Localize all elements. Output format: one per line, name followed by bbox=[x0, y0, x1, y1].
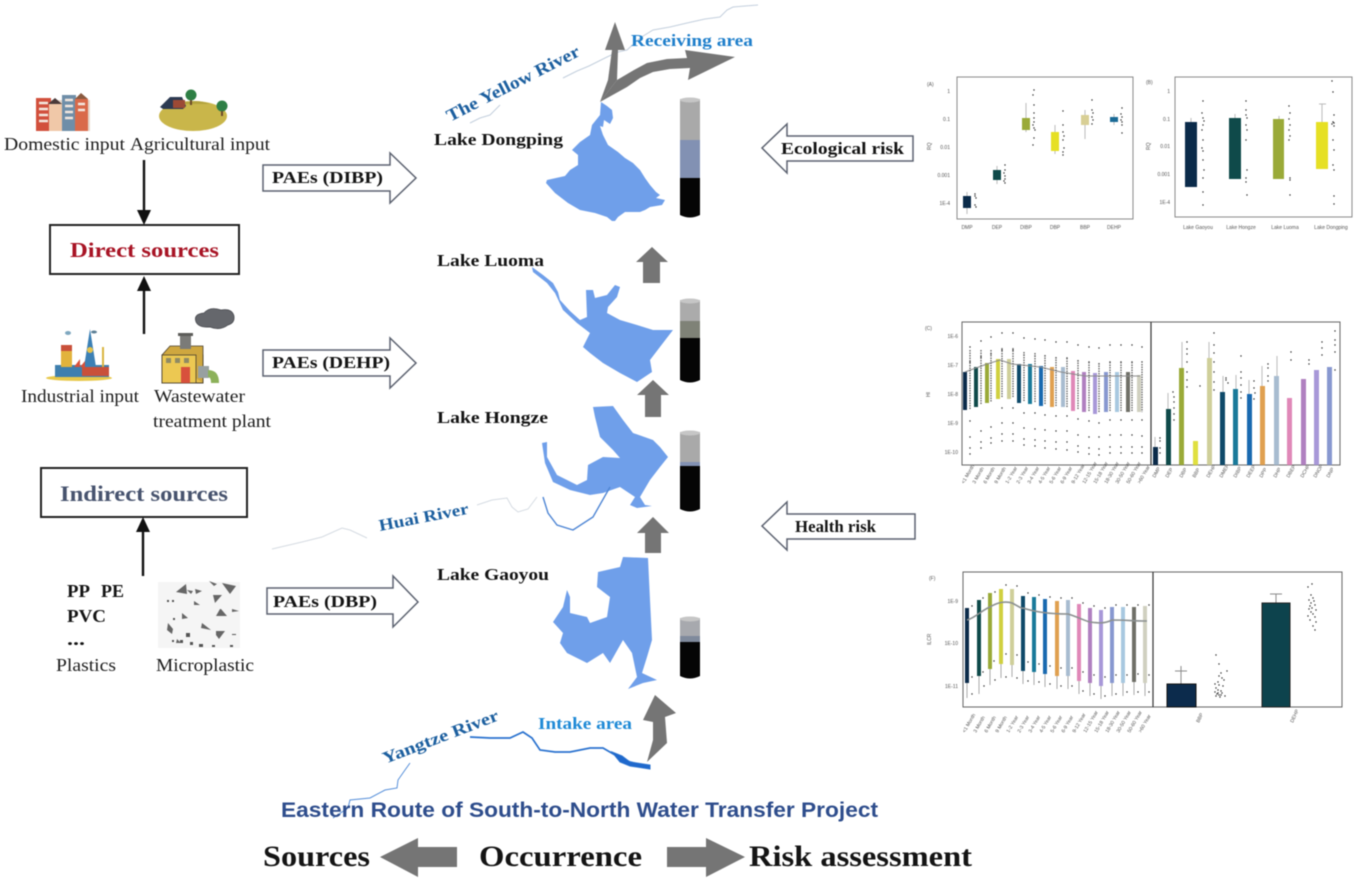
chart: RQ by compound (A): 1E-4 bbox=[939, 201, 950, 207]
arrow: occurrence to risk assessment bbox=[667, 838, 745, 877]
arrow: Hongze to Luoma bbox=[637, 380, 669, 417]
river: Yellow River bbox=[470, 5, 758, 123]
chart: HI by age and compound (C): 50-60 Year bbox=[1126, 461, 1143, 485]
chart: RQ by lake (B): RQ bbox=[1146, 142, 1152, 150]
arrow: occurrence to sources bbox=[380, 838, 457, 877]
chart: ILCR by age and compound (F): 1E-11 bbox=[945, 684, 958, 690]
chart: HI by age and compound (C): DCHP bbox=[1300, 463, 1312, 479]
chart: ILCR by age and compound (F): 9 Month bbox=[995, 715, 1009, 734]
core: Luoma sediment bbox=[680, 298, 700, 382]
label: industrial input: Industrial input bbox=[21, 386, 139, 406]
chart: HI by age and compound (C): DHP bbox=[1273, 466, 1283, 479]
chart: HI by age and compound (C): 3 Month bbox=[972, 466, 986, 485]
chart: ILCR by age and compound (F): 50-60 Year bbox=[1127, 710, 1144, 734]
chart: HI by age and compound (C): 2-3 Year bbox=[1016, 466, 1030, 485]
chart: RQ by lake (B): 0.01 bbox=[1160, 144, 1170, 150]
chart: RQ by compound (A): BBP bbox=[1080, 225, 1091, 231]
chart: HI by age and compound (C): 1E-6 bbox=[947, 334, 958, 340]
box: direct sources: Direct sources bbox=[70, 238, 219, 262]
chart: RQ by compound (A): 1 bbox=[947, 89, 950, 95]
chart: HI by age and compound (C): 5-6 Year bbox=[1049, 466, 1063, 485]
chart: ILCR by age and compound (F): DEHP bbox=[1289, 708, 1301, 724]
chart: RQ by compound (A): RQ bbox=[927, 142, 933, 150]
arrow: intake bbox=[643, 695, 676, 762]
river: Yangtze River bbox=[333, 732, 650, 818]
chart: HI by age and compound (C): 1-2 Year bbox=[1005, 466, 1019, 485]
chart: RQ by lake (B): Lake Hongze bbox=[1226, 225, 1256, 231]
chart: RQ by lake (B) bbox=[1146, 77, 1352, 231]
box: indirect sources bbox=[41, 468, 247, 517]
chart: ILCR by age and compound (F): 30-50 Year bbox=[1116, 710, 1133, 734]
chart: HI by age and compound (C): DMP bbox=[1152, 466, 1163, 479]
label: Occurrence: Occurrence bbox=[479, 840, 642, 873]
chart: RQ by compound (A): DEHP bbox=[1107, 225, 1122, 231]
panel: occurrence along water route bbox=[272, 5, 878, 822]
chart: ILCR by age and compound (F): 1E-10 bbox=[945, 641, 958, 647]
chart: ILCR by age and compound (F): 3 Month bbox=[973, 715, 987, 734]
chart: ILCR by age and compound (F): 2-3 Year bbox=[1017, 715, 1031, 734]
arrow: Ecological risk bbox=[762, 124, 913, 173]
chart: ILCR by age and compound (F): 6-9 Year bbox=[1061, 715, 1075, 734]
chart: ILCR by age and compound (F): 15-18 Year bbox=[1094, 710, 1111, 734]
label: project title: Eastern Route of South-to-North Water Transfer Project bbox=[281, 799, 878, 822]
label: Lake Gaoyou: Lake Gaoyou bbox=[437, 565, 549, 584]
label: Receiving area: Receiving area bbox=[631, 31, 754, 50]
chart: HI by age and compound (C): <1 Month bbox=[961, 464, 976, 485]
chart: HI by age and compound (C): DNOP bbox=[1313, 463, 1325, 479]
chart: HI by age and compound (C): 9 Month bbox=[994, 466, 1008, 485]
arrow: industrial inputs to direct sources bbox=[137, 276, 151, 334]
chart: RQ by lake (B): 1E-4 bbox=[1159, 200, 1170, 206]
chart: RQ by compound (A): (A) bbox=[927, 82, 934, 88]
chart: ILCR by age and compound (F): 12-15 Year bbox=[1083, 710, 1100, 734]
label: plastics: Plastics bbox=[56, 655, 116, 675]
arrow: PAEs DIBP bbox=[263, 153, 416, 203]
chart: HI by age and compound (C): HI bbox=[926, 392, 932, 397]
chart: HI by age and compound (C): DBEP bbox=[1286, 464, 1298, 479]
footer: framework flow bbox=[263, 838, 972, 877]
label: plastics list: PVC bbox=[67, 606, 106, 626]
chart: HI by age and compound (C) bbox=[925, 322, 1340, 485]
chart: HI by age and compound (C): 1E-10 bbox=[945, 450, 958, 456]
arrow: to north bbox=[600, 22, 625, 102]
arrow: Luoma to Dongping bbox=[636, 247, 668, 283]
label: wastewater treatment plant: Wastewater bbox=[154, 386, 245, 406]
chart: HI by age and compound (C): 9-12 Year bbox=[1071, 463, 1087, 485]
panel: sources bbox=[4, 90, 271, 675]
chart: RQ by compound (A): DMP bbox=[961, 225, 973, 231]
arrow: plastics to indirect sources bbox=[136, 517, 150, 576]
label: Intake area: Intake area bbox=[538, 714, 633, 733]
label: domestic input: Domestic input bbox=[4, 134, 125, 154]
core: Hongze sediment bbox=[680, 430, 700, 512]
icon: agricultural farm bbox=[159, 90, 228, 131]
chart: HI by age and compound (C): DIBP bbox=[1233, 465, 1244, 479]
icon: industrial factory bbox=[46, 329, 112, 381]
chart: RQ by lake (B): 1 bbox=[1167, 89, 1170, 95]
chart: RQ by compound (A): 0.001 bbox=[937, 173, 950, 179]
chart: HI by age and compound (C): DPP bbox=[1259, 467, 1269, 479]
chart: RQ by lake (B): (B) bbox=[1146, 80, 1153, 86]
chart: ILCR by age and compound (F): 9-12 Year bbox=[1072, 712, 1088, 734]
chart: RQ by compound (A): DIBP bbox=[1020, 225, 1032, 231]
label: Yangtze River: Yangtze River bbox=[380, 706, 502, 768]
label: plastics list bbox=[67, 581, 124, 649]
chart: HI by age and compound (C): (C) bbox=[925, 326, 932, 332]
label: agricultural input: Agricultural input bbox=[130, 134, 270, 154]
chart: ILCR by age and compound (F): >60 Year bbox=[1138, 713, 1153, 734]
arrow: PAEs DIBP: PAEs (DIBP) bbox=[272, 168, 383, 187]
chart: ILCR by age and compound (F): 1-2 Year bbox=[1006, 715, 1020, 734]
arrow: PAEs DBP bbox=[267, 576, 418, 627]
chart: HI by age and compound (C): 6 Month bbox=[983, 466, 997, 485]
chart: RQ by compound (A): 0.01 bbox=[940, 145, 950, 151]
chart: ILCR by age and compound (F): <1 Month bbox=[962, 713, 977, 734]
chart: HI by age and compound (C): 1E-8 bbox=[947, 392, 958, 398]
chart: ILCR by age and compound (F): 3-4 Year bbox=[1028, 715, 1042, 734]
arrow: PAEs DEHP: PAEs (DEHP) bbox=[272, 353, 390, 372]
panel: risk arrows bbox=[762, 124, 915, 550]
arrow: PAEs DEHP bbox=[263, 338, 416, 388]
chart: ILCR by age and compound (F): BBP bbox=[1195, 712, 1205, 724]
arrow: to receiving area bbox=[600, 50, 735, 102]
arrow: Gaoyou to Hongze bbox=[637, 517, 669, 553]
label: Lake Luoma: Lake Luoma bbox=[437, 251, 545, 270]
lake: Gaoyou bbox=[553, 557, 657, 689]
river: Huai River bbox=[272, 497, 537, 549]
core: Dongping sediment bbox=[680, 98, 700, 218]
arrow: PAEs DBP: PAEs (DBP) bbox=[273, 592, 377, 611]
lake: Dongping bbox=[546, 102, 665, 221]
chart: HI by age and compound (C): DBP bbox=[1179, 467, 1189, 479]
chart: ILCR by age and compound (F): (F) bbox=[929, 576, 936, 582]
label: Lake Dongping: Lake Dongping bbox=[434, 130, 564, 149]
chart: HI by age and compound (C): >60 Year bbox=[1137, 464, 1152, 485]
arrow: Health risk bbox=[762, 502, 915, 550]
chart: HI by age and compound (C): 1E-7 bbox=[947, 363, 958, 369]
label: microplastic: Microplastic bbox=[156, 655, 254, 675]
label: plastics list: PP bbox=[67, 581, 90, 601]
chart: HI by age and compound (C): DEEP bbox=[1246, 464, 1258, 479]
chart: HI by age and compound (C): 12-15 Year bbox=[1082, 461, 1099, 485]
chart: RQ by lake (B): Lake Dongping bbox=[1314, 225, 1348, 231]
chart: RQ by compound (A) bbox=[927, 77, 1133, 231]
chart: ILCR by age and compound (F): 1E-9 bbox=[947, 599, 958, 605]
icon: wastewater treatment plant bbox=[162, 309, 234, 383]
chart: HI by age and compound (C): 30-50 Year bbox=[1115, 461, 1132, 485]
chart: HI by age and compound (C): DMEP bbox=[1219, 463, 1231, 479]
arrow: inputs to direct sources bbox=[137, 160, 151, 225]
chart: HI by age and compound (C): 1E-9 bbox=[947, 421, 958, 427]
box: indirect sources: Indirect sources bbox=[60, 481, 228, 506]
chart: HI by age and compound (C): 6-9 Year bbox=[1060, 466, 1074, 485]
chart: HI by age and compound (C): DEHP bbox=[1206, 463, 1218, 479]
chart: RQ by lake (B): 0.001 bbox=[1157, 172, 1170, 178]
lake: Hongze bbox=[542, 406, 668, 530]
chart: ILCR by age and compound (F): 4-5 Year bbox=[1039, 715, 1053, 734]
chart: HI by age and compound (C): DEP bbox=[1165, 467, 1175, 479]
chart: ILCR by age and compound (F): ILCR bbox=[927, 633, 933, 645]
chart: RQ by lake (B): 0.1 bbox=[1163, 117, 1170, 123]
label: plastics list: PE bbox=[101, 581, 124, 601]
chart: ILCR by age and compound (F): 5-6 Year bbox=[1050, 715, 1064, 734]
chart: RQ by compound (A): DBP bbox=[1050, 225, 1061, 231]
chart: RQ by lake (B): Lake Gaoyou bbox=[1183, 225, 1213, 231]
lake: Luoma bbox=[532, 267, 673, 382]
chart: HI by age and compound (C): 4-5 Year bbox=[1038, 466, 1052, 485]
box: direct sources bbox=[50, 225, 239, 274]
chart: HI by age and compound (C): 15-18 Year bbox=[1093, 461, 1110, 485]
chart: ILCR by age and compound (F) bbox=[927, 572, 1342, 734]
arrow: Health risk: Health risk bbox=[795, 517, 877, 536]
label: Risk assessment: Risk assessment bbox=[749, 840, 972, 873]
label: wastewater treatment plant: treatment plant bbox=[153, 411, 271, 431]
chart: RQ by compound (A): 0.1 bbox=[943, 117, 950, 123]
label: plastics list: ... bbox=[67, 629, 85, 649]
arrow: Ecological risk: Ecological risk bbox=[781, 139, 905, 158]
icon: domestic buildings bbox=[36, 93, 90, 131]
chart: RQ by compound (A): DEP bbox=[992, 225, 1003, 231]
icon: microplastic particles bbox=[158, 581, 240, 648]
label: Lake Hongze: Lake Hongze bbox=[437, 408, 549, 427]
label: Huai River: Huai River bbox=[377, 499, 470, 535]
chart: HI by age and compound (C): BBP bbox=[1192, 467, 1202, 479]
chart: HI by age and compound (C): 18-30 Year bbox=[1104, 461, 1121, 485]
core: Gaoyou sediment bbox=[680, 616, 700, 678]
chart: HI by age and compound (C): DNP bbox=[1326, 466, 1336, 479]
label: The Yellow River: The Yellow River bbox=[443, 41, 583, 126]
chart: ILCR by age and compound (F): 6 Month bbox=[984, 715, 998, 734]
chart: HI by age and compound (C): 3-4 Year bbox=[1027, 466, 1041, 485]
chart: RQ by lake (B): Lake Luoma bbox=[1271, 225, 1299, 231]
chart: ILCR by age and compound (F): 18-30 Year bbox=[1105, 710, 1122, 734]
label: wastewater treatment plant bbox=[153, 386, 271, 431]
label: Sources: Sources bbox=[263, 840, 370, 873]
